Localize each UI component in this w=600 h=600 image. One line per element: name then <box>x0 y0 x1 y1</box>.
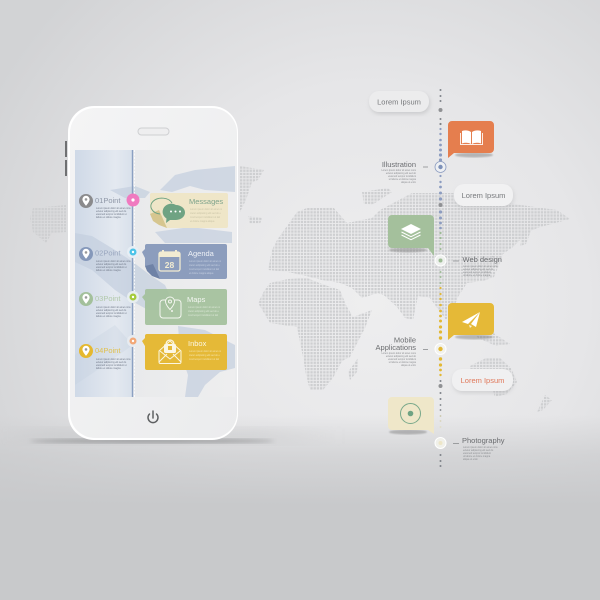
pill: lorem ipsum two <box>454 184 514 208</box>
map: southeast asia islands <box>470 328 510 346</box>
item: 02 point: Lorem ipsum dolor sit amet cons <box>96 260 131 263</box>
card: messages: ctetur adipiscing elit sed do e <box>190 212 222 215</box>
item: 01 point: eiusmod tempor incididunt ut <box>96 213 127 216</box>
label: web design: eiusmod tempor incididunt <box>463 271 491 274</box>
label: mobile applications <box>376 336 428 367</box>
item: 03 point: ectetur adipiscing elit sed do <box>96 309 127 312</box>
label: photography: ectetur adipiscing elit sed do <box>463 449 494 452</box>
item: 03 point: labore et dolore magna <box>96 315 121 318</box>
node: illustration <box>435 162 446 172</box>
pill: lorem ipsum one: Lorem Ipsum <box>377 98 421 106</box>
icon: calendar: 28 <box>165 260 174 270</box>
map: small island <box>248 216 262 224</box>
screen map shapes <box>75 166 235 397</box>
pill: lorem ipsum three <box>452 369 513 393</box>
label: photography: Photography <box>462 436 505 445</box>
card: agenda: et dolore magna aliqua <box>189 272 214 275</box>
label: mobile applications: ut labore et dolore magna <box>389 361 417 364</box>
icon: paper plane <box>462 312 480 328</box>
item: 04 point: ectetur adipiscing elit sed do <box>96 361 127 364</box>
label: web design <box>453 255 502 277</box>
label: photography <box>453 436 505 461</box>
item: 01 point: Lorem ipsum dolor sit amet cons <box>96 207 131 210</box>
screen <box>75 150 235 397</box>
map: madagascar <box>348 358 358 380</box>
label: photography: Lorem ipsum dolor sit amet cons <box>463 446 498 449</box>
screen spine <box>132 150 134 397</box>
label: illustration: ectetur adipiscing elit sed do <box>386 172 417 175</box>
side buttons <box>65 141 67 176</box>
label: mobile applications: aliqua ut enim <box>401 364 416 367</box>
phone <box>65 106 238 440</box>
label: web design: ectetur adipiscing elit sed do <box>463 268 494 271</box>
timeline dots: green <box>439 232 442 284</box>
floor edge shading <box>0 428 340 444</box>
label: mobile applications: Lorem ipsum dolor sit amet cons <box>381 352 417 355</box>
item: 01 point: labore et dolore magna <box>96 216 121 219</box>
phone body <box>68 106 238 440</box>
label: illustration: aliqua ut enim <box>401 181 416 184</box>
map: greenland strip <box>362 188 392 205</box>
item: 04 point: 04Point <box>95 346 121 355</box>
label: photography: ut labore et dolore magna <box>463 455 491 458</box>
label: photography: aliqua ut enim <box>463 458 478 461</box>
icon: lens <box>400 404 420 424</box>
label: illustration: ut labore et dolore magna <box>389 178 417 181</box>
item: 01 point: ectetur adipiscing elit sed do <box>96 210 127 213</box>
dotted world map <box>30 166 570 412</box>
card: maps: ctetur adipiscing elit sed do e <box>188 310 220 313</box>
item: 02 point: eiusmod tempor incididunt ut <box>96 266 127 269</box>
item: 04 point <box>79 335 139 370</box>
item: 02 point <box>79 246 139 272</box>
map: australia <box>468 358 517 397</box>
label: web design: Lorem ipsum dolor sit amet cons <box>463 265 498 268</box>
card: maps: mod tempor incididunt ut lab <box>188 314 219 317</box>
map: north america left fragment <box>30 205 66 243</box>
icon: map pin <box>160 297 181 318</box>
timeline dots: blue <box>438 128 442 229</box>
card: messages <box>150 193 228 228</box>
power icon <box>148 411 158 423</box>
label: mobile applications: Mobile <box>394 336 416 344</box>
card: agenda <box>142 244 227 279</box>
pill: lorem ipsum one <box>369 91 430 114</box>
pill: lorem ipsum three: Lorem Ipsum <box>461 376 504 385</box>
item: 03 point: Lorem ipsum dolor sit amet cons <box>96 306 131 309</box>
pill: lorem ipsum two: Lorem Ipsum <box>462 191 505 200</box>
bubble: mobile paper plane <box>448 303 494 340</box>
map: japan <box>520 228 532 246</box>
timeline dots: yellow <box>439 287 442 376</box>
map: new zealand <box>537 395 552 412</box>
label: illustration: eiusmod tempor incididunt <box>388 175 416 178</box>
card: messages: Lorem ipsum dolor sit amet co <box>190 208 223 211</box>
card: messages: Messages <box>189 197 223 206</box>
speaker <box>138 128 169 135</box>
background floor <box>0 415 600 600</box>
timeline <box>435 89 446 467</box>
item: 02 point: 02Point <box>95 248 121 258</box>
item: 04 point: Lorem ipsum dolor sit amet cons <box>96 358 131 361</box>
label: illustration: Lorem ipsum dolor sit amet cons <box>381 169 417 172</box>
card: maps: Maps <box>187 295 206 304</box>
node: mobile applications <box>435 344 446 354</box>
bubble: photography lens <box>388 397 434 434</box>
label: mobile applications: eiusmod tempor incididunt <box>388 358 416 361</box>
timeline dots: lower grey <box>438 380 442 467</box>
card: agenda: Agenda <box>188 249 215 258</box>
bubble: illustration book <box>448 121 494 158</box>
card: agenda: Lorem ipsum dolor sit amet co <box>189 260 222 263</box>
map: eurasia <box>268 193 570 320</box>
card: agenda: ctetur adipiscing elit sed do e <box>189 264 221 267</box>
item: 04 point: eiusmod tempor incididunt ut <box>96 364 127 367</box>
item: 01 point <box>79 194 140 219</box>
item: 01 point: 01Point <box>95 196 121 205</box>
card: maps: Lorem ipsum dolor sit amet co <box>188 306 221 309</box>
label: web design: ut labore et dolore magna <box>463 274 491 277</box>
item: 02 point: labore et dolore magna <box>96 269 121 272</box>
item: 02 point: ectetur adipiscing elit sed do <box>96 263 127 266</box>
item: 04 point: labore et dolore magna <box>96 367 121 370</box>
card: maps <box>142 289 227 325</box>
node: web design <box>435 255 446 266</box>
item: 03 point: eiusmod tempor incididunt ut <box>96 312 127 315</box>
map: africa <box>258 278 372 390</box>
label: mobile applications: Applications <box>376 343 416 352</box>
card: inbox: mod tempor incididunt ut lab <box>189 358 220 361</box>
card: messages: et dolore magna aliqua <box>190 220 215 223</box>
icon: open book <box>460 130 483 145</box>
card: inbox <box>142 334 227 370</box>
label: illustration <box>381 160 428 184</box>
card: inbox: Inbox <box>188 339 207 348</box>
icon: chat bubbles <box>151 198 185 223</box>
map: north america right fragment <box>240 166 264 212</box>
bubble: web design layers <box>388 215 434 256</box>
icon: envelope <box>159 340 181 364</box>
card: inbox: Lorem ipsum dolor sit amet co <box>189 350 222 353</box>
phone floor shadow <box>30 438 274 444</box>
label: mobile applications: ectetur adipiscing elit sed do <box>386 355 417 358</box>
label: photography: eiusmod tempor incididunt <box>463 452 491 455</box>
icon: layers <box>401 224 421 240</box>
node: photography <box>435 438 446 448</box>
label: illustration: Illustration <box>382 160 416 169</box>
card: agenda: mod tempor incididunt ut lab <box>189 268 220 271</box>
item: 03 point <box>79 291 139 318</box>
timeline dots: top grey <box>438 89 442 125</box>
item: 03 point: 03Point <box>95 294 121 303</box>
card: inbox: ctetur adipiscing elit sed do e <box>189 354 221 357</box>
label: web design: Web design <box>462 255 502 264</box>
card: messages: mod tempor incididunt ut lab <box>190 216 221 219</box>
